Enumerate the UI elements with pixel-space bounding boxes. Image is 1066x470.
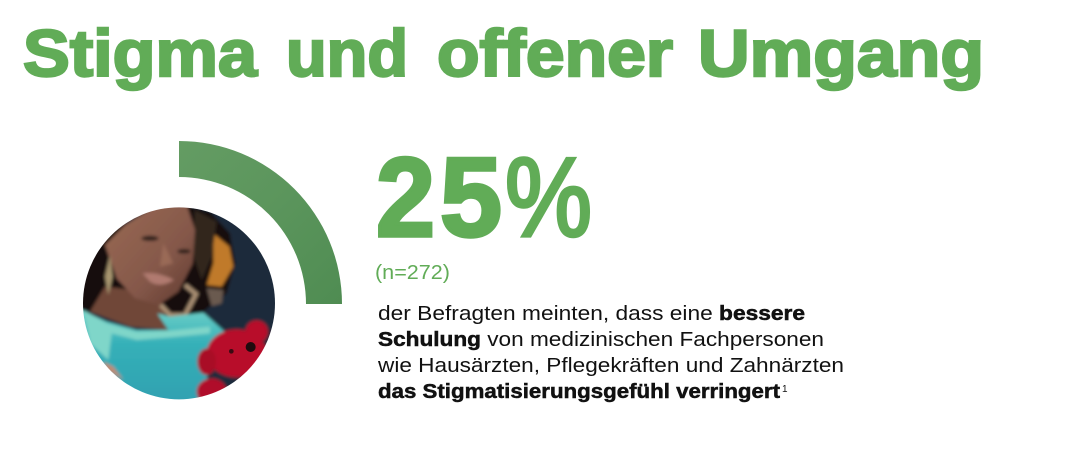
left earring bbox=[105, 255, 113, 295]
body line 4: das Stigmatisierungsgefühl verringert bbox=[378, 381, 780, 403]
neck and chest bbox=[90, 287, 168, 330]
quarter arc: 25% progress ring bbox=[179, 141, 342, 304]
shirt collar and sleeve bbox=[83, 310, 210, 360]
body text bbox=[377, 303, 844, 403]
face bbox=[105, 205, 195, 305]
sample size: (n=272) bbox=[375, 262, 450, 284]
dark hair bbox=[83, 208, 236, 314]
right earring bbox=[161, 285, 196, 315]
nose shadow bbox=[160, 246, 173, 266]
body line 1: der Befragten meinten, dass eine bessere bbox=[378, 303, 805, 325]
photo background bbox=[86, 208, 275, 388]
title word: Stigma: Stigma bbox=[23, 16, 258, 90]
shirt bbox=[83, 308, 228, 400]
digit 2: 2 bbox=[376, 135, 435, 260]
title word: Umgang: Umgang bbox=[698, 16, 984, 90]
body line 2: Schulung von medizinischen Fachpersonen bbox=[378, 329, 824, 351]
title word: offener: offener bbox=[437, 16, 673, 90]
percent sign: % bbox=[505, 135, 592, 260]
big number: 25% bbox=[376, 135, 592, 260]
digit 5: 5 bbox=[440, 135, 502, 260]
lips bbox=[143, 273, 174, 285]
title bbox=[23, 16, 984, 90]
photo: woman with red teddy bear bbox=[83, 207, 275, 400]
body line 3: wie Hausärzten, Pflegekräften und Zahnärzten bbox=[377, 355, 844, 377]
hair highlight bbox=[207, 233, 233, 287]
teddy bear bbox=[207, 329, 267, 377]
footnote marker: 1 bbox=[782, 384, 788, 395]
title word: und: und bbox=[286, 16, 408, 90]
arm bbox=[103, 362, 123, 380]
eyes bbox=[141, 236, 159, 241]
